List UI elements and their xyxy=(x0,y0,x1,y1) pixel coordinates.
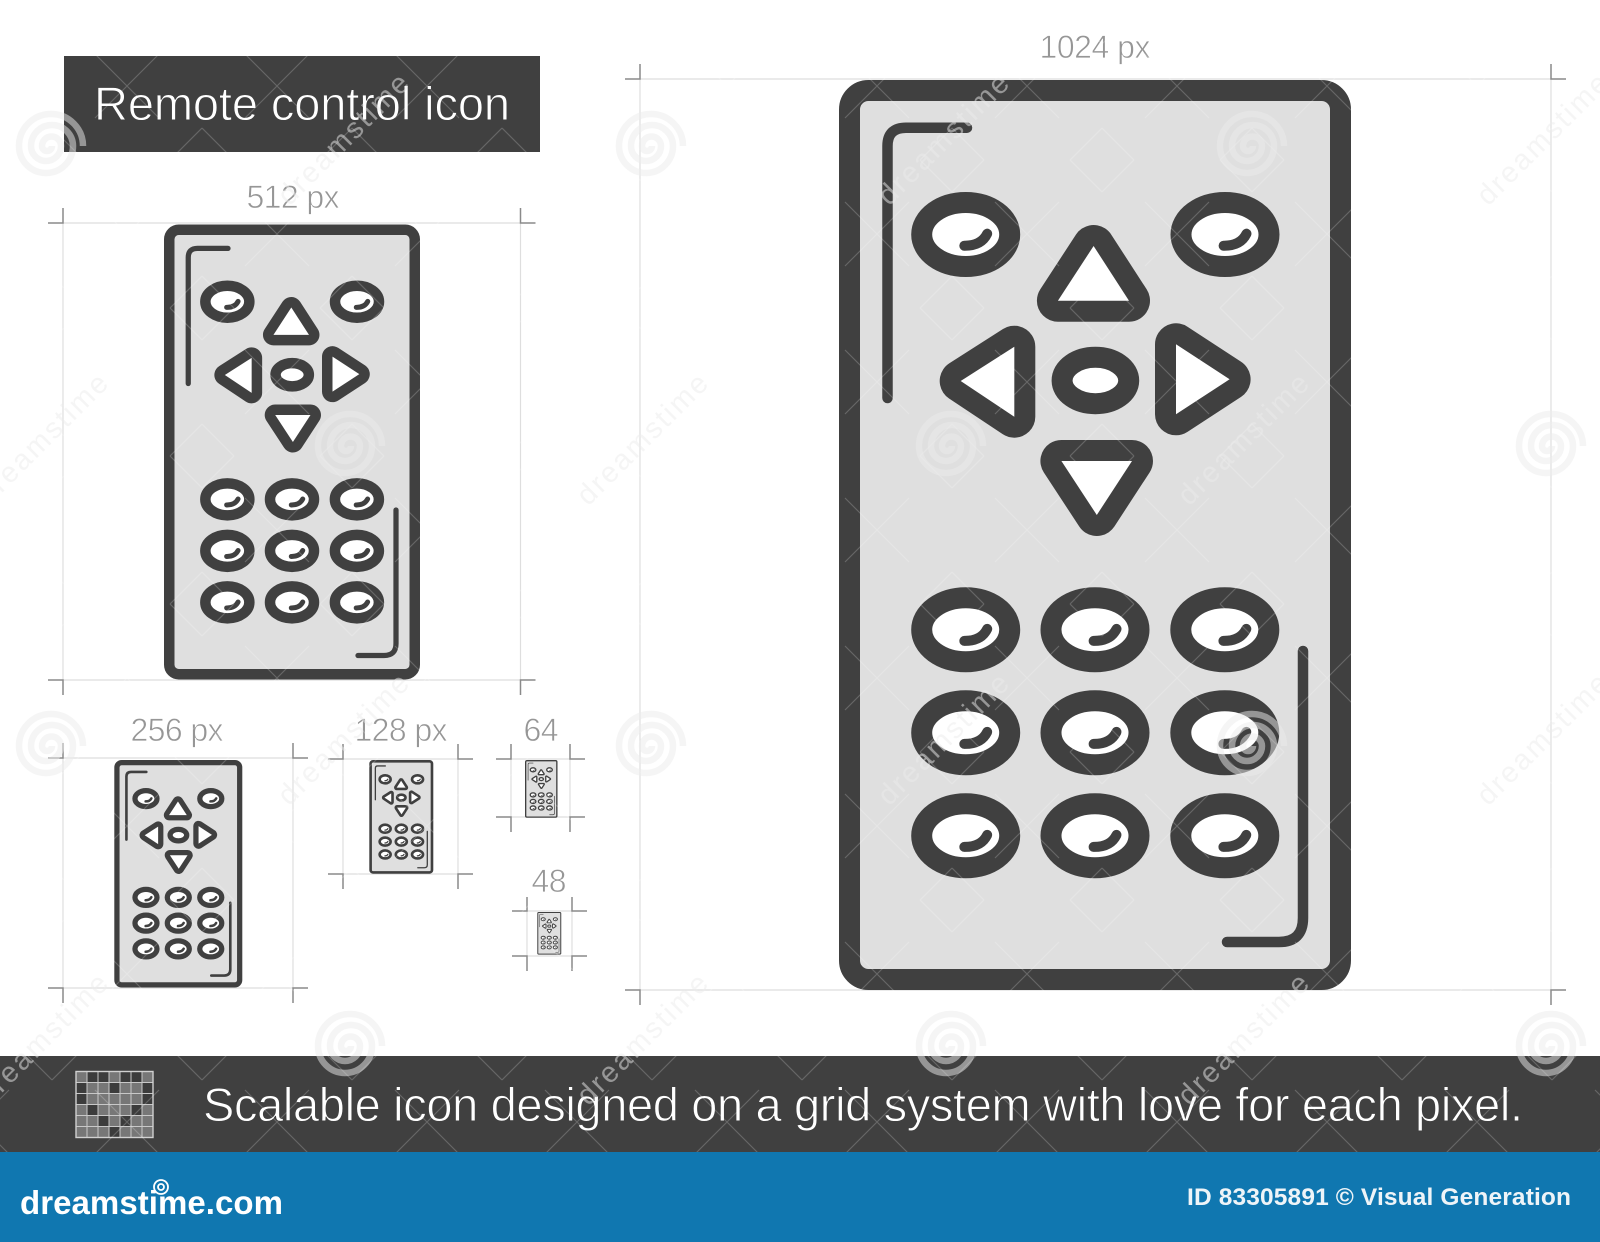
watermark overlay: dreamstime xyxy=(1172,368,1316,512)
size guides: 1024 px xyxy=(625,64,1566,1005)
size guides: 128 px xyxy=(328,744,473,889)
title: Remote control icon xyxy=(94,77,510,130)
watermark overlay: dreamstime xyxy=(872,68,1016,212)
size label: 64: 64 xyxy=(524,712,558,748)
logo: dreamstime.com: dreamstime.com xyxy=(20,1184,283,1221)
icon: remote control 128 px xyxy=(371,761,432,872)
size label: 1024 px: 1024 px xyxy=(1040,29,1150,65)
size guides: 64 xyxy=(496,744,585,832)
size guides: 256 px xyxy=(48,743,308,1003)
size guides: 512 px xyxy=(48,208,536,695)
icon: remote control 512 px xyxy=(169,230,415,674)
size guides: 48 xyxy=(512,897,587,971)
footer band: grid message xyxy=(0,1056,1600,1152)
bottom brand bar xyxy=(0,1152,1600,1242)
title xyxy=(64,56,540,152)
icon: remote control 64 px xyxy=(526,761,557,817)
watermark overlay: dreamstime xyxy=(571,968,715,1112)
watermark overlay: dreamstime xyxy=(872,668,1016,812)
icon: pixel grid with heart xyxy=(76,1072,153,1138)
watermark overlay: dreamstime xyxy=(1172,968,1316,1112)
watermark overlay: dreamstime xyxy=(571,368,715,512)
size label: 128 px: 128 px xyxy=(354,712,448,748)
image credit: ID 83305891 © Visual Generation xyxy=(1187,1184,1571,1211)
footer text: Scalable icon designed on a grid system with love for each pixel. xyxy=(203,1078,1523,1131)
icon: remote control 48 px xyxy=(538,912,561,954)
icon: remote control 256 px xyxy=(117,763,240,985)
watermark overlay: dreamstime xyxy=(272,668,416,812)
size label: 256 px: 256 px xyxy=(130,712,224,748)
size label: 512 px: 512 px xyxy=(246,179,340,215)
icon: remote control 1024 px xyxy=(850,90,1340,980)
watermark overlay: dreamstime xyxy=(272,68,416,212)
size label: 48: 48 xyxy=(532,863,566,899)
